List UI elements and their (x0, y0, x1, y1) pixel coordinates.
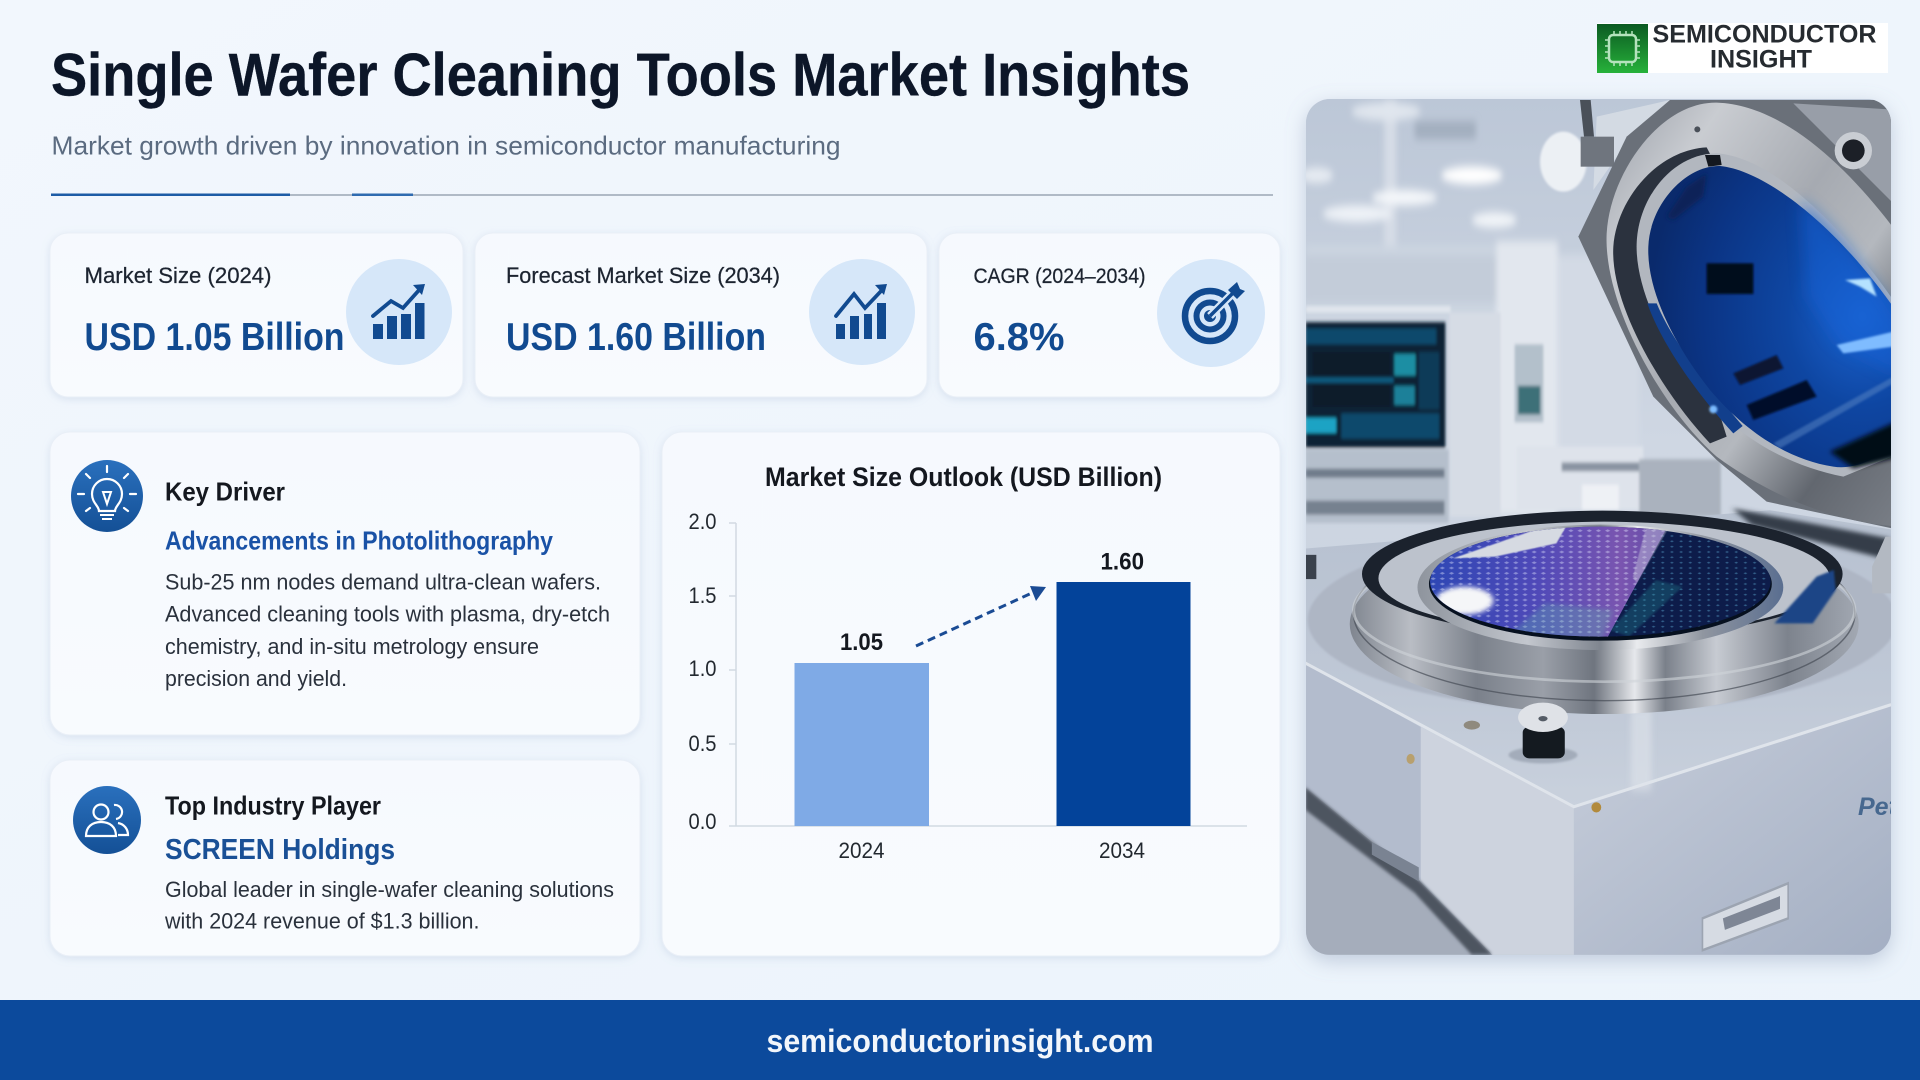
y axis labels: 0.0 (688, 809, 716, 834)
lab monitor (1306, 322, 1721, 523)
bar 2024 (794, 663, 929, 826)
wafer lip (1417, 525, 1783, 650)
tool body (1306, 510, 1891, 955)
y axis labels: 1.0 (688, 656, 716, 681)
panel: market size 2024 (50, 233, 463, 397)
label: Forecast Market Size (2034) (506, 263, 780, 288)
driver description: precision and yield. (165, 666, 347, 691)
silicon wafer (1426, 523, 1774, 641)
player description: Global leader in single-wafer cleaning solutions (165, 877, 614, 902)
icon: growth chart (809, 259, 915, 365)
dark seal ring (1362, 511, 1843, 637)
y axis labels: 2.0 (688, 509, 716, 534)
panel: market size outlook chart (662, 432, 1280, 956)
icon: green chip (1597, 24, 1648, 73)
player name: SCREEN Holdings (165, 834, 395, 866)
lab background (1306, 99, 1891, 548)
driver description (165, 570, 610, 691)
mounting plate (1308, 566, 1891, 706)
player description: with 2024 revenue of $1.3 billion. (164, 908, 480, 934)
value: 6.8% (974, 316, 1064, 359)
machine lettering: Pet (1858, 793, 1899, 821)
value 1.60: 1.60 (1100, 548, 1144, 576)
icon: people (73, 786, 141, 854)
label: Market Size (2024) (84, 263, 272, 288)
x label 2024: 2024 (838, 838, 884, 863)
label: CAGR (2024–2034) (974, 265, 1146, 288)
icon: light bulb (71, 460, 143, 532)
y axis labels (688, 509, 716, 834)
open chamber lid (1540, 100, 1900, 530)
y axis labels: 0.5 (688, 731, 716, 756)
rear rail (1732, 508, 1889, 560)
panel: key driver (50, 432, 640, 735)
axes (729, 523, 1247, 826)
driver description: Advanced cleaning tools with plasma, dry-etch (165, 602, 610, 626)
logo wordmark: INSIGHT (1710, 46, 1812, 74)
value 1.05: 1.05 (840, 629, 883, 656)
value: USD 1.05 Billion (84, 316, 344, 359)
x label 2034: 2034 (1099, 838, 1145, 863)
player description (164, 877, 614, 934)
header divider (51, 194, 1273, 196)
bar 2034 (1056, 582, 1190, 826)
polished ring (1350, 588, 1858, 714)
footer band (0, 1000, 1920, 1080)
photo: wafer cleaning tool (1300, 99, 1900, 955)
photo shadow (1306, 99, 1891, 955)
logo wordmark: SEMICONDUCTOR (1652, 20, 1876, 48)
driver description: Sub-25 nm nodes demand ultra-clean wafers. (165, 570, 601, 594)
growth arrow (916, 586, 1046, 646)
title: Single Wafer Cleaning Tools Market Insights (51, 42, 1190, 108)
y axis labels: 1.5 (688, 583, 716, 608)
inner dish (1378, 522, 1829, 620)
subtitle: Market growth driven by innovation in semiconductor manufacturing (52, 130, 841, 160)
logo: Semiconductor Insight (1597, 20, 1888, 74)
panel: forecast market size 2034 (475, 233, 927, 397)
icon: target (1157, 259, 1265, 367)
right bracket (1872, 537, 1891, 593)
driver name: Advancements in Photolithography (165, 526, 553, 556)
logo wordmark (1652, 20, 1876, 74)
driver description: chemistry, and in-situ metrology ensure (165, 634, 539, 659)
panel: top industry player (50, 760, 640, 956)
chart title: Market Size Outlook (USD Billion) (765, 462, 1162, 492)
heading: Top Industry Player (165, 790, 381, 820)
footer website: semiconductorinsight.com (766, 1023, 1154, 1059)
icon: growth chart (346, 259, 452, 365)
wafer chuck assembly (1308, 508, 1897, 763)
panel: CAGR (939, 233, 1280, 397)
value: USD 1.60 Billion (506, 316, 766, 359)
heading: Key Driver (165, 476, 285, 506)
button post (1509, 703, 1577, 763)
